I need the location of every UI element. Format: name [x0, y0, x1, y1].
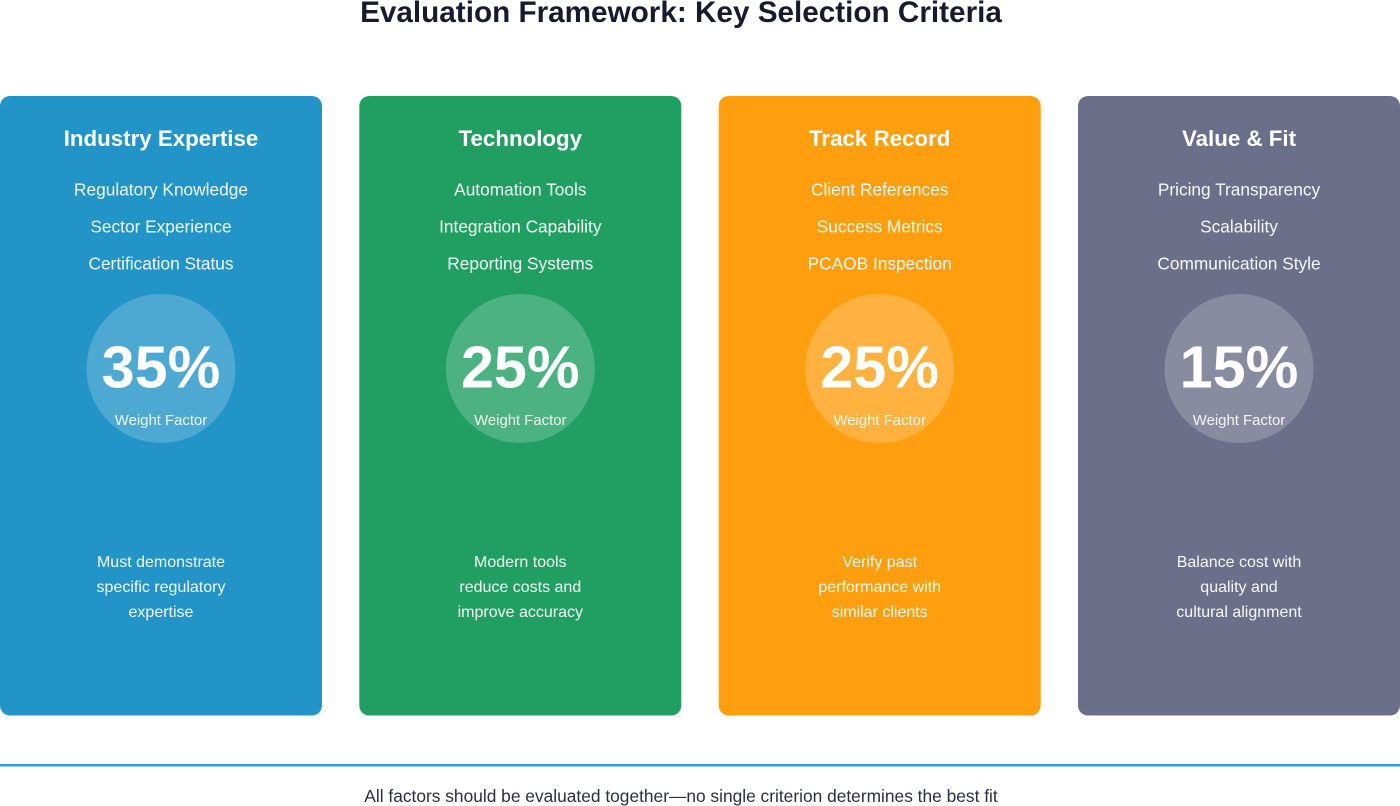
footer note: All factors should be evaluated together—no single criterion determines the best fit [364, 786, 998, 806]
criteria list: technology: Integration Capability [439, 216, 602, 236]
criteria list: track record: Success Metrics [817, 216, 943, 236]
description: track record: similar clients [832, 604, 928, 621]
criteria list: value and fit: Scalability [1200, 216, 1278, 236]
weight circle: 15%: Weight Factor [1193, 413, 1285, 429]
criteria list: industry expertise: Certification Status [88, 253, 234, 273]
weight circle: 35%: 35% [102, 334, 220, 400]
description: value and fit: quality and [1200, 579, 1278, 596]
panel: technology [359, 96, 681, 716]
heading: value and fit: Value & Fit [1182, 126, 1297, 151]
weight circle: 25%: 25% [820, 334, 939, 400]
criteria list: technology: Automation Tools [454, 179, 587, 199]
weight circle: 25%: Weight Factor [833, 413, 926, 429]
criteria list: technology: Reporting Systems [447, 253, 594, 273]
description: technology: Modern tools [474, 554, 567, 571]
criteria list: value and fit [1157, 179, 1321, 273]
criteria list: value and fit: Pricing Transparency [1158, 179, 1321, 199]
criteria list: track record [808, 179, 952, 273]
criteria list: industry expertise: Sector Experience [90, 216, 232, 236]
panel: track record [719, 96, 1041, 716]
description: value and fit [1176, 554, 1302, 621]
heading: industry expertise: Industry Expertise [64, 126, 258, 151]
description: technology: improve accuracy [458, 604, 583, 621]
criteria list: track record: Client References [811, 179, 949, 199]
criteria list: industry expertise: Regulatory Knowledge [74, 179, 248, 199]
heading: track record: Track Record [809, 126, 950, 151]
weight circle: 25%: Weight Factor [474, 413, 567, 429]
weight circle: 35% [86, 294, 236, 443]
description: technology: reduce costs and [459, 579, 581, 596]
criteria list: value and fit: Communication Style [1157, 253, 1321, 273]
weight circle: 15%: 15% [1180, 334, 1298, 400]
description: industry expertise: expertise [129, 604, 194, 621]
criteria list: track record: PCAOB Inspection [808, 253, 952, 273]
weight circle: 15% [1164, 294, 1314, 443]
description: track record [818, 554, 941, 621]
weight circle: 25%: 25% [461, 334, 580, 400]
panel: value and fit [1078, 96, 1400, 716]
heading: technology: Technology [459, 126, 583, 151]
description: value and fit: cultural alignment [1176, 604, 1302, 621]
weight circle: 25% [805, 294, 954, 443]
description: track record: Verify past [842, 554, 918, 571]
weight circle: 35%: Weight Factor [115, 413, 207, 429]
weight circle: 25% [446, 294, 595, 443]
description: track record: performance with [818, 579, 941, 596]
description: industry expertise [97, 554, 225, 621]
panel: industry expertise [0, 96, 322, 716]
description: value and fit: Balance cost with [1177, 554, 1301, 571]
criteria list: technology [439, 179, 602, 273]
criteria list: industry expertise [74, 179, 248, 273]
description: technology [458, 554, 583, 621]
description: industry expertise: specific regulatory [97, 579, 225, 596]
description: industry expertise: Must demonstrate [97, 554, 225, 571]
